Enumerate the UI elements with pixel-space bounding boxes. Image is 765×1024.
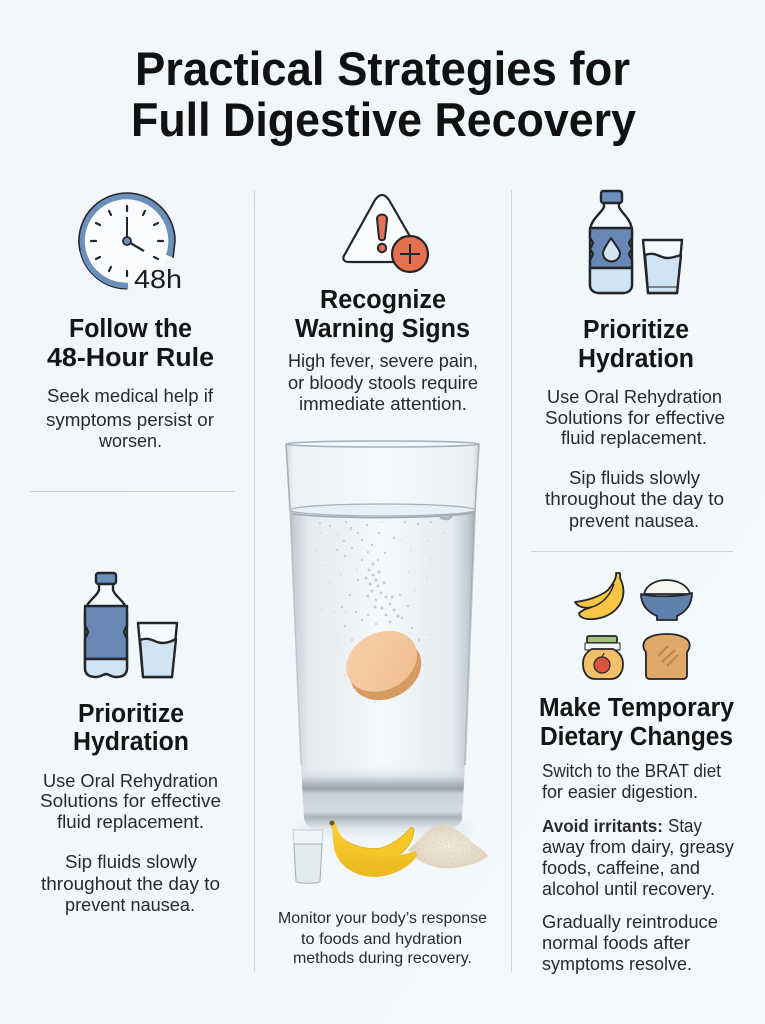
illustration: small water glass bbox=[293, 830, 323, 883]
heading: prioritize hydration right: Prioritize bbox=[583, 316, 689, 344]
text: caption monitor your body: to foods and hydration bbox=[301, 931, 462, 948]
heading: recognize warning signs bbox=[295, 286, 470, 343]
text: avoid irritants: foods, caffeine, and bbox=[542, 857, 700, 878]
text: caption monitor your body bbox=[278, 910, 487, 967]
text: warning symptoms: immediate attention. bbox=[299, 393, 467, 414]
heading: recognize warning signs: Warning Signs bbox=[295, 315, 470, 343]
text: oral rehydration right: fluid replacement. bbox=[561, 427, 707, 448]
text: reintroduce foods: Gradually reintroduce bbox=[542, 911, 718, 932]
text: avoid irritants: away from dairy, greasy bbox=[542, 836, 735, 857]
illustration: bananas bbox=[330, 820, 417, 877]
text: avoid irritants bbox=[542, 815, 735, 899]
text: sip fluids left: Sip fluids slowly bbox=[65, 851, 198, 872]
text: oral rehydration left bbox=[40, 770, 221, 832]
text: sip fluids right bbox=[545, 467, 724, 531]
text: oral rehydration left: Use Oral Rehydration bbox=[43, 770, 218, 791]
panel: dietary changes bbox=[539, 573, 735, 974]
title: Full Digestive Recovery bbox=[131, 93, 636, 146]
text: sip fluids left: throughout the day to bbox=[41, 873, 220, 894]
heading: prioritize hydration right bbox=[578, 316, 694, 373]
text: oral rehydration left: fluid replacement. bbox=[57, 811, 204, 832]
bubbles bbox=[316, 522, 444, 702]
text: warning symptoms: High fever, severe pain, bbox=[288, 350, 478, 371]
icon: toast bbox=[643, 634, 690, 679]
text: reintroduce foods bbox=[542, 911, 718, 974]
text: seek medical help: worsen. bbox=[98, 430, 162, 451]
icon: BRAT foods bbox=[575, 573, 692, 679]
text: sip fluids left bbox=[41, 851, 220, 915]
text: oral rehydration right: Use Oral Rehydration bbox=[547, 386, 722, 407]
text: seek medical help: Seek medical help if bbox=[47, 385, 214, 406]
panel: warning signs bbox=[288, 195, 478, 414]
glass body bbox=[286, 441, 479, 830]
text: sip fluids right: throughout the day to bbox=[545, 488, 724, 509]
illustration: glass with dissolving tablet bbox=[286, 441, 479, 834]
text: BRAT diet bbox=[542, 760, 721, 802]
heading: prioritize hydration right: Hydration bbox=[578, 345, 694, 373]
heading: follow the 48-hour rule: 48-Hour Rule bbox=[47, 344, 214, 372]
panel: prioritize hydration right bbox=[545, 191, 725, 531]
text: oral rehydration right: Solutions for effective bbox=[545, 407, 725, 428]
text: sip fluids right: prevent nausea. bbox=[569, 510, 699, 531]
heading: make temporary dietary changes: Dietary Changes bbox=[540, 723, 733, 751]
heading: follow the 48-hour rule bbox=[47, 315, 214, 372]
text: sip fluids left: prevent nausea. bbox=[65, 894, 195, 915]
panel: 48-hour rule bbox=[46, 193, 214, 451]
heading: follow the 48-hour rule: Follow the bbox=[69, 315, 192, 343]
icon: bottle and glass left bbox=[85, 573, 177, 677]
text: seek medical help bbox=[46, 385, 214, 451]
panel: prioritize hydration left bbox=[40, 573, 221, 915]
text: avoid irritants: Avoid irritants: bbox=[542, 816, 663, 836]
text: sip fluids right: Sip fluids slowly bbox=[569, 467, 701, 488]
icon: jam jar bbox=[583, 636, 623, 679]
text: BRAT diet: for easier digestion. bbox=[542, 781, 698, 802]
icon: bottle with drop and glass bbox=[590, 191, 682, 293]
text: oral rehydration right bbox=[545, 386, 725, 448]
heading: prioritize hydration left: Prioritize bbox=[78, 700, 184, 728]
text: BRAT diet: Switch to the BRAT diet bbox=[542, 760, 721, 781]
icon: warning triangle with plus bbox=[343, 195, 428, 272]
text: reintroduce foods: normal foods after bbox=[542, 932, 690, 953]
text: seek medical help: symptoms persist or bbox=[46, 409, 214, 430]
heading: prioritize hydration left bbox=[73, 700, 189, 756]
title: Practical Strategies for bbox=[135, 42, 630, 95]
text: avoid irritants: Stay bbox=[668, 815, 703, 836]
text: caption monitor your body: methods during recovery. bbox=[293, 950, 472, 967]
text: avoid irritants: alcohol until recovery. bbox=[542, 878, 715, 899]
heading: make temporary dietary changes: Make Temporary bbox=[539, 694, 735, 722]
effervescent tablet bbox=[336, 619, 432, 712]
text: oral rehydration left: Solutions for effective bbox=[40, 790, 221, 811]
text: warning symptoms: or bloody stools require bbox=[288, 372, 478, 393]
heading: make temporary dietary changes bbox=[539, 694, 735, 751]
heading: prioritize hydration left: Hydration bbox=[73, 728, 189, 756]
text: warning symptoms bbox=[288, 350, 478, 414]
icon: clock 48h bbox=[79, 193, 182, 294]
illustration: rice pile bbox=[408, 824, 488, 868]
icon: banana bbox=[575, 573, 623, 619]
text: reintroduce foods: symptoms resolve. bbox=[542, 953, 692, 974]
text: caption monitor your body: Monitor your body’s response bbox=[278, 910, 487, 927]
icon: rice bowl bbox=[641, 580, 692, 620]
title bbox=[131, 42, 636, 146]
icon: clock 48h: 48h bbox=[134, 264, 182, 294]
heading: recognize warning signs: Recognize bbox=[320, 286, 446, 314]
